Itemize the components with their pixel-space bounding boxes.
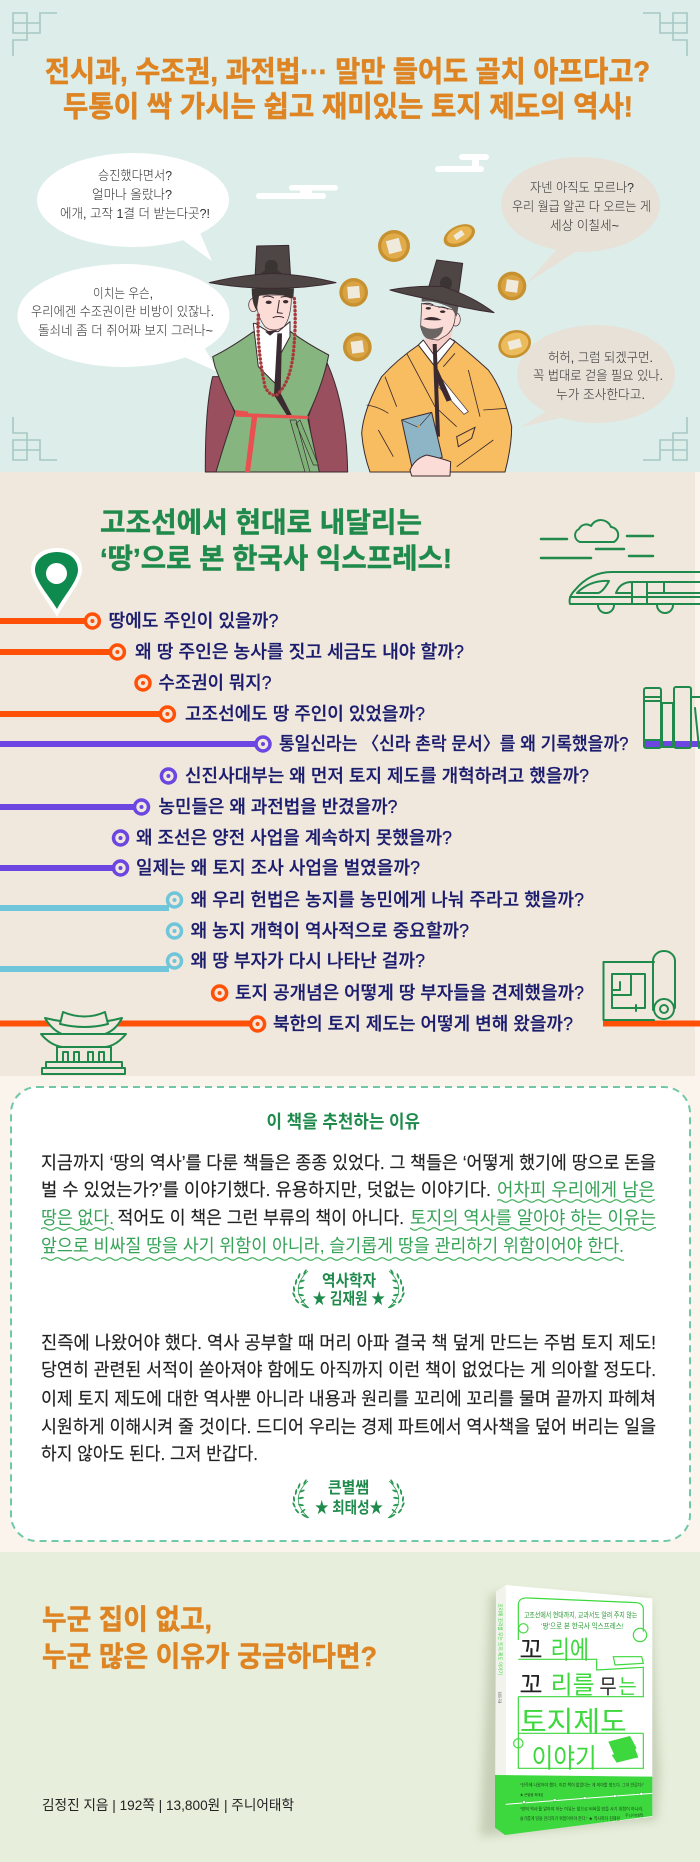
route line 4: 고조선에도 땅 주인이 있었을까? [185, 704, 425, 724]
speech bubble: bottom right: 누가 조사한다고. [556, 387, 645, 402]
speech bubble: lower left: 이치는 우슨, [93, 286, 153, 301]
heading: ‘땅’으로 본 한국사 익스프레스! [100, 543, 452, 574]
panel: book footer [42, 1585, 660, 1837]
corner ornaments [13, 13, 687, 460]
attribution: historian [292, 1269, 405, 1309]
book cover: 토지제도 [520, 1707, 627, 1739]
text block: first review: 토지의 역사를 알아야 하는 이유는 [410, 1208, 656, 1228]
book cover: 김정진 지음 [498, 1692, 503, 1703]
route line 8: 왜 조선은 양전 사업을 계속하지 못했을까? [136, 828, 452, 848]
route line 6: 신진사대부는 왜 먼저 토지 제도를 개혁하려고 했을까? [185, 766, 589, 786]
book cover: 무 [599, 1675, 617, 1698]
cover track lines [514, 1598, 647, 1768]
left official [205, 245, 348, 472]
book cover: 꼬 [519, 1636, 543, 1664]
speech bubble: bottom right: 허허, 그럼 되겠구먼. [548, 350, 653, 365]
icon: palace [41, 1012, 126, 1074]
book cover: 리에 [551, 1636, 589, 1664]
speech bubble: top right: 자넨 아직도 모르나? [530, 180, 634, 195]
text block: first review: 벌 수 있었는가?’를 이야기했다. 유용하지만, 덧없는 이야기다. [41, 1180, 491, 1200]
route line 12: 왜 땅 부자가 다시 나타난 걸까? [191, 951, 425, 971]
text block: first review: 앞으로 비싸질 땅을 사기 위함이 아니라, 슬기롭게 땅을 관리하기 위함이어야 한다. [41, 1236, 624, 1256]
text block: first review [41, 1153, 656, 1262]
route line 12 [0, 951, 425, 972]
illustration: two officials and coins [205, 220, 535, 476]
book cover: 슬기롭게 땅을 관리하기 위함이어야 한다.” ★ 역사학자 김재원 [520, 1815, 620, 1822]
speech bubble: top right: 세상 이칠세~ [550, 218, 619, 233]
speech bubble: bottom right [517, 325, 675, 427]
attribution: history teacher: ★ 최태성★ [315, 1499, 383, 1517]
speech bubble: lower left: 우리에겐 수조권이란 비방이 있잖나. [31, 304, 214, 319]
route line 9: 일제는 왜 토지 조사 사업을 벌였을까? [136, 858, 420, 878]
speech bubble: lower left [18, 264, 230, 372]
book cover: 꼬 [519, 1671, 543, 1699]
route line 9 [0, 858, 420, 878]
panel: recommendation card [11, 1087, 690, 1541]
book details: 김정진 지음 | 192쪽 | 13,800원 | 주니어태학 [42, 1797, 294, 1813]
route line 4 [0, 704, 425, 724]
text block: first review: 지금까지 ‘땅의 역사’를 다룬 책들은 종종 있었다. 그 책들은 ‘어떻게 했기에 땅으로 돈을 [41, 1153, 656, 1173]
text block: second review [41, 1333, 656, 1464]
speech bubble: top left [37, 153, 229, 261]
book cover: 주니어태학 [625, 1813, 644, 1818]
text block: first review: 적어도 이 책은 그런 부류의 책이 아니다. [118, 1208, 404, 1228]
route line 7: 농민들은 왜 과전법을 반겼을까? [158, 797, 398, 817]
attribution: history teacher [292, 1479, 405, 1519]
route line 5: 통일신라는 〈신라 촌락 문서〉를 왜 기록했을까? [279, 734, 628, 754]
panel: route map [0, 507, 700, 1074]
route line 14 [0, 1014, 700, 1034]
title: 전시과, 수조권, 과전법··· 말만 들어도 골치 아프다고? [45, 56, 650, 88]
route line 2: 왜 땅 주인은 농사를 짓고 세금도 내야 할까? [135, 642, 464, 662]
text block: first review: 땅은 없다. [41, 1208, 114, 1228]
heading: 누군 많은 이유가 궁금하다면? [42, 1641, 377, 1672]
speech bubble: top right: 우리 월급 알곤 다 오르는 게 [512, 199, 651, 214]
route line 1: 땅에도 주인이 있을까? [108, 611, 278, 631]
route line 3: 수조권이 뭐지? [158, 673, 272, 693]
speech bubble: top right [501, 157, 660, 283]
heading: 고조선에서 현대로 내달리는 [100, 507, 422, 538]
route line 5 [0, 734, 700, 754]
title: 두통이 싹 가시는 쉽고 재미있는 토지 제도의 역사! [63, 90, 633, 124]
speech bubble: top left: 승진했다면서? [98, 168, 172, 183]
right official [362, 260, 512, 476]
book cover: “진즉에 나왔어야 했다. 이런 책이 없었다는 게 의아할 정도다. 그저 반갑다!” [520, 1782, 645, 1789]
route line 1 [0, 611, 278, 631]
panel: hero [13, 13, 687, 476]
heading [42, 1604, 377, 1672]
route line 14: 북한의 토지 제도는 어떻게 변해 왔을까? [273, 1014, 573, 1034]
icon: blueprint [604, 951, 675, 1020]
route line 11: 왜 농지 개혁이 역사적으로 중요할까? [191, 921, 469, 941]
text block: first review: 어차피 우리에게 남은 [497, 1180, 655, 1200]
speech bubble: top left: 에개, 고작 1결 더 받는다곳?! [60, 206, 210, 221]
title [45, 56, 650, 124]
book cover: ‘땅’으로 본 한국사 익스프레스! [541, 1621, 624, 1630]
book cover: 꼬리에 꼬리를 무는 토지 제도 이야기 [497, 1603, 504, 1675]
route line 13: 토지 공개념은 어떻게 땅 부자들을 견제했을까? [235, 983, 584, 1003]
route line 7 [0, 797, 398, 817]
coins [339, 220, 535, 363]
book cover [480, 1585, 660, 1837]
text block: second review: 진즉에 나왔어야 했다. 역사 공부할 때 머리 아파 결국 책 덮게 만드는 주범 토지 제도! [41, 1333, 656, 1353]
book cover: 리를 [551, 1671, 595, 1699]
heading: why we recommend: 이 책을 추천하는 이유 [266, 1112, 420, 1132]
heading [100, 507, 452, 574]
attribution: historian: 역사학자 [322, 1272, 376, 1290]
decorative clouds [256, 154, 489, 199]
attribution: history teacher: 큰별쌤 [328, 1479, 369, 1497]
attribution: historian: ★ 김재원 ★ [312, 1290, 385, 1308]
route line 10 [0, 890, 584, 911]
heading: 누군 집이 없고, [42, 1604, 212, 1635]
text block: second review: 하지 않아도 된다. 그저 반갑다. [41, 1444, 258, 1464]
route line 10: 왜 우리 헌법은 농지를 농민에게 나눠 주라고 했을까? [191, 890, 584, 910]
book cover: 고조선에서 현대까지, 교과서도 알려 주지 않는 [524, 1610, 638, 1619]
text block: second review: 시원하게 이해시켜 줄 것이다. 드디어 우리는 경제 파트에서 역사책을 덮어 버리는 일을 [41, 1417, 656, 1437]
text block: second review: 이제 토지 제도에 대한 역사뿐 아니라 내용과 원리를 꼬리에 꼬리를 물며 끝까지 파헤쳐 [41, 1389, 656, 1409]
book cover: “땅의 역사’를 알아야 하는 이유는 앞으로 비싸질 땅을 사기 위함이 아니라, [520, 1806, 643, 1813]
speech bubble: lower left: 돌쇠네 좀 더 쥐어짜 보지 그러나~ [38, 323, 213, 338]
speech bubble: bottom right: 꼭 법대로 걷을 필요 있나. [533, 368, 663, 383]
speech bubble: top left: 얼마나 올랐나? [92, 187, 172, 202]
book cover: 이야기 [532, 1743, 597, 1773]
book cover: 는 [618, 1675, 637, 1698]
icon: location pin [31, 548, 82, 617]
text block: second review: 당연히 관련된 서적이 쏟아져야 함에도 아직까지 이런 책이 없었다는 게 의아할 정도다. [41, 1360, 656, 1380]
book cover: ★ 큰별쌤 최태성 [520, 1792, 543, 1797]
icon: books [644, 687, 700, 748]
icon: train and clouds [541, 520, 700, 613]
